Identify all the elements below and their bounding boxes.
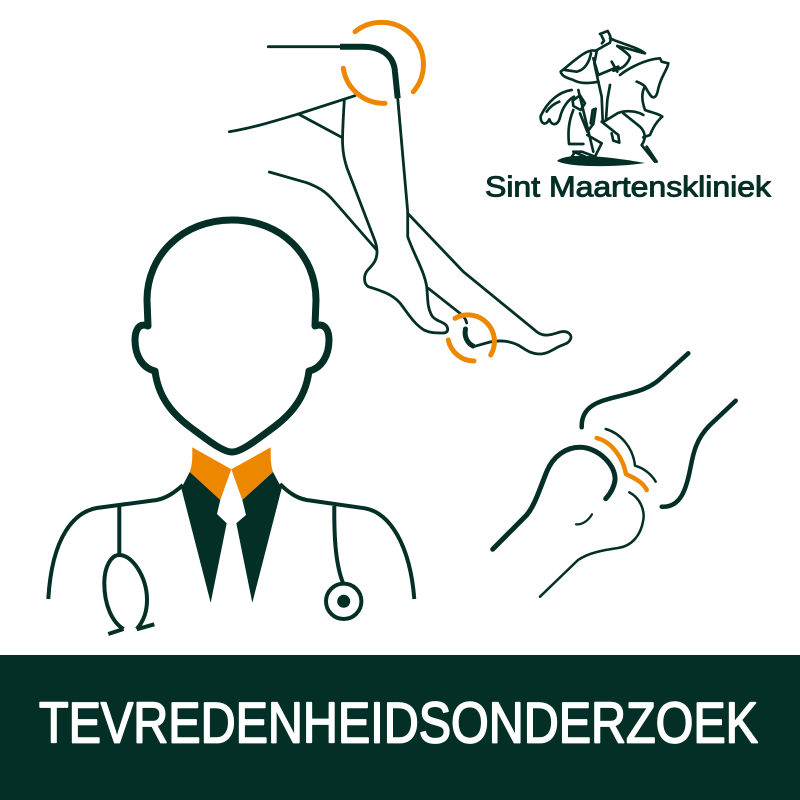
horse chest and belly [604, 87, 662, 137]
femur lower contour [662, 401, 736, 507]
orange ankle pain arcs [448, 315, 494, 361]
horse tail [541, 90, 574, 124]
upper leg line [268, 45, 340, 48]
logo figure: horse and rider [541, 31, 668, 162]
rider cloak [561, 50, 598, 83]
orange cartilage line [597, 438, 647, 490]
doctor illustration [48, 220, 414, 634]
stethoscope tubing left [104, 506, 154, 634]
left shoulder and arm [48, 485, 183, 599]
rear leg and foot outline [408, 213, 571, 354]
thigh line [229, 96, 355, 132]
ankle line [428, 288, 467, 323]
Sint Maartenskliniek logo [485, 31, 772, 203]
thin cartilage line [606, 429, 656, 482]
stethoscope tubing and chest piece right [326, 506, 361, 619]
orange shirt collar [190, 447, 273, 500]
banner background [0, 655, 800, 800]
dark jacket lapels [181, 472, 282, 603]
highlighted thick heel contour [465, 329, 473, 346]
doctor head outline [135, 220, 329, 452]
femur upper contour [582, 353, 688, 427]
right shoulder and arm [280, 484, 414, 599]
front leg outline and foot [343, 98, 448, 333]
rear leg line [269, 172, 377, 250]
kneeling man [573, 90, 593, 152]
rider legs [598, 82, 610, 120]
legs illustration [229, 47, 571, 354]
tibia contour [540, 492, 644, 597]
horse head and neck [620, 58, 668, 97]
rider torso and sword [593, 46, 630, 82]
knee joint illustration [493, 353, 736, 597]
rider head and cape [596, 31, 645, 53]
bone head contour [493, 447, 615, 549]
back of knee triangle [298, 114, 342, 137]
orange knee pain arcs [343, 22, 423, 103]
highlighted thick knee contour [340, 47, 398, 98]
small crease [576, 514, 592, 524]
logo ground shadow [557, 156, 645, 166]
horse legs [602, 113, 657, 162]
title banner [0, 655, 800, 800]
logo wordmark: Sint Maartenskliniek [485, 172, 772, 204]
